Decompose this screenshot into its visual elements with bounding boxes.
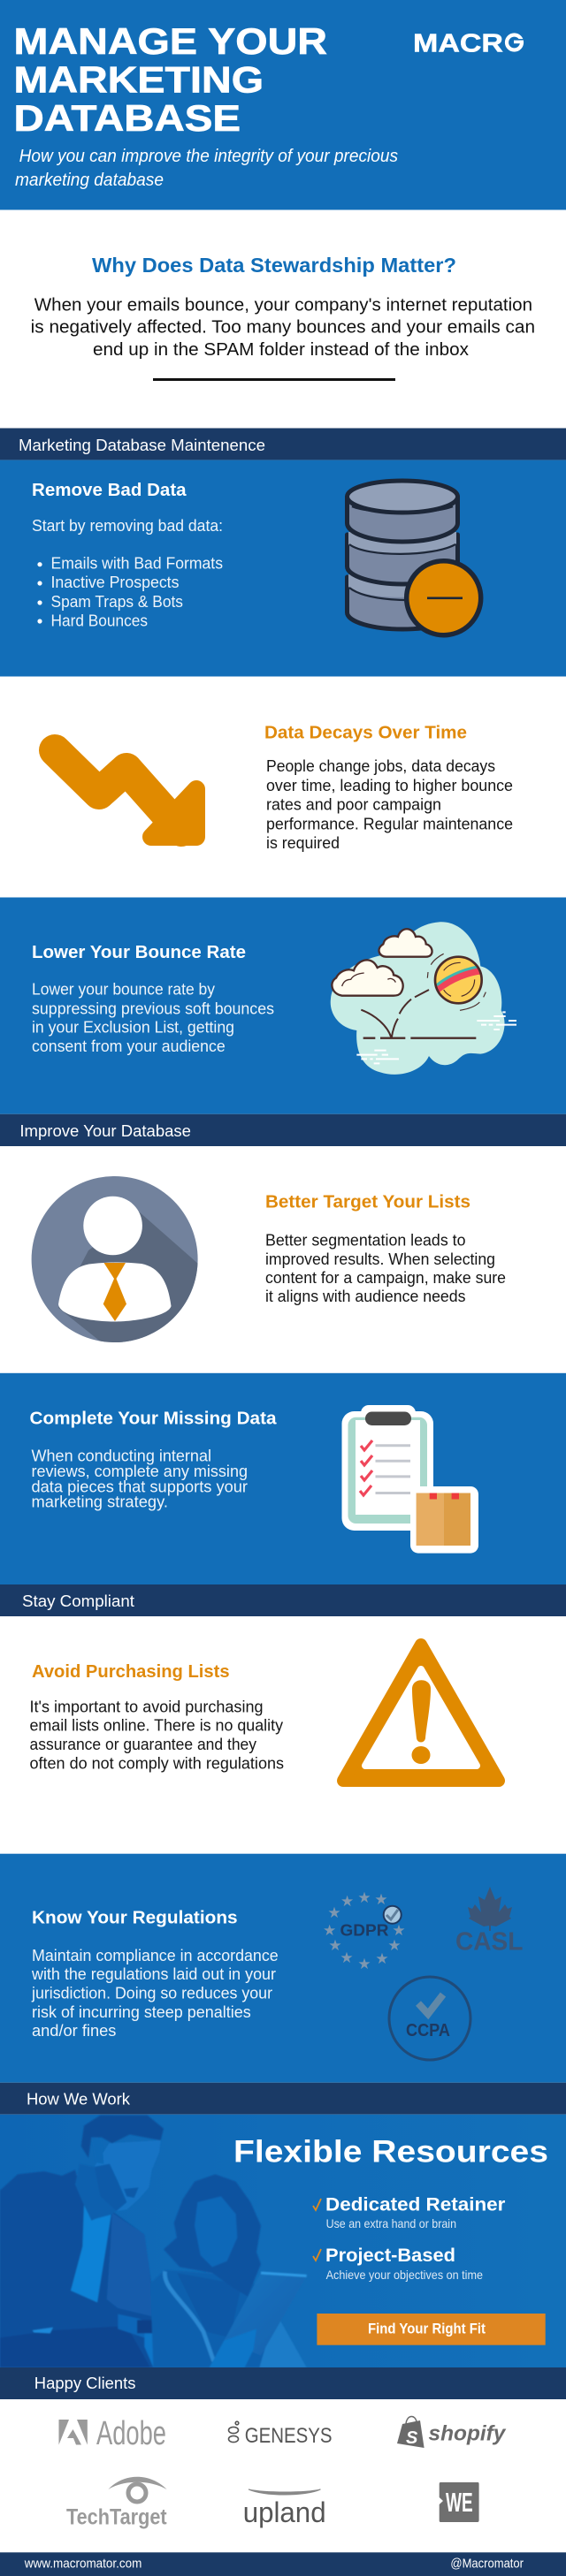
section band: improve your database	[0, 1114, 566, 1146]
icon: person with tie	[32, 1176, 198, 1343]
icon: bouncing ball	[331, 922, 516, 1075]
panel: avoid purchasing lists	[30, 1645, 499, 1781]
bullet list: Emails with Bad Formats	[51, 555, 223, 573]
icon: gdpr badge: ★	[387, 1937, 402, 1954]
logo: shopify	[397, 2416, 507, 2448]
text block: with the regulations laid out in your	[31, 1965, 276, 1983]
text block: improved results. When selecting	[265, 1250, 495, 1268]
text block: content for a campaign, make sure	[265, 1269, 506, 1287]
text block: and/or fines	[32, 2022, 116, 2040]
logo: macro: MACR	[413, 30, 503, 58]
section band: improve your database: Improve Your Database	[19, 1122, 191, 1140]
heading: Lower Your Bounce Rate	[32, 943, 246, 962]
logo: we: WE	[446, 2487, 473, 2518]
panel: header	[0, 0, 566, 210]
heading: Better Target Your Lists	[265, 1192, 470, 1212]
text block: end up in the SPAM folder instead of the inbox	[93, 340, 469, 360]
text block: Lower your bounce rate by	[32, 980, 215, 998]
logo: techtarget	[66, 2477, 167, 2530]
icon: gdpr badge: ★	[323, 1922, 336, 1939]
title: MANAGE YOUR	[14, 20, 327, 62]
title: MARKETING	[14, 58, 264, 101]
icon: gdpr badge: ★	[375, 1950, 389, 1967]
text block: It's important to avoid purchasing	[30, 1698, 264, 1716]
text block: performance. Regular maintenance	[266, 816, 513, 833]
heading: Avoid Purchasing Lists	[32, 1662, 230, 1682]
text block: When your emails bounce, your company's internet reputation	[34, 296, 532, 315]
text block: Better segmentation leads to	[265, 1232, 465, 1250]
panel: flexible resources	[0, 2115, 566, 2367]
text block: email lists online. There is no quality	[30, 1717, 283, 1735]
text block	[31, 296, 535, 360]
text block: People change jobs, data decays	[266, 757, 495, 775]
text block: is required	[266, 834, 340, 852]
option: dedicated retainer: Use an extra hand or brain	[326, 2216, 456, 2230]
title	[14, 20, 327, 139]
heading: Remove Bad Data	[32, 481, 187, 500]
icon: casl badge: CASL	[455, 1928, 523, 1957]
text block	[30, 1698, 284, 1772]
section band: marketing database maintenence: Marketing Database Maintenence	[19, 437, 265, 454]
photo: colleagues with tablet	[0, 2116, 307, 2367]
text block: over time, leading to higher bounce	[266, 777, 513, 794]
text block: marketing strategy.	[32, 1493, 168, 1511]
panel: data decays over time	[55, 723, 513, 852]
option: project-based: Project-Based	[325, 2245, 455, 2266]
section band: happy clients: Happy Clients	[34, 2375, 135, 2392]
section band: happy clients	[0, 2367, 566, 2399]
text block	[265, 1232, 506, 1305]
subtitle	[15, 147, 398, 190]
option: project-based	[313, 2245, 483, 2282]
icon: warning triangle	[343, 1645, 499, 1781]
icon: casl badge	[455, 1887, 523, 1957]
logo: adobe: Adobe	[96, 2415, 166, 2452]
text block: often do not comply with regulations	[30, 1754, 284, 1772]
text block: Start by removing bad data:	[32, 517, 223, 535]
section band: how we work: How We Work	[27, 2091, 131, 2109]
text block: rates and poor campaign	[266, 796, 441, 814]
logo: adobe	[58, 2415, 166, 2452]
panel: why data stewardship matters	[31, 254, 535, 381]
text block	[31, 1947, 279, 2040]
logo: we	[440, 2482, 479, 2522]
heading: Data Decays Over Time	[264, 723, 467, 742]
option: dedicated retainer	[313, 2195, 505, 2230]
icon: clipboard and box	[341, 1405, 478, 1554]
panel: lower your bounce rate	[0, 898, 566, 1114]
icon: gdpr badge: GDPR	[340, 1922, 389, 1940]
section band: marketing database maintenence	[0, 428, 566, 460]
text block: it aligns with audience needs	[265, 1288, 465, 1305]
title: DATABASE	[14, 97, 241, 139]
icon: gdpr badge: ★	[340, 1893, 354, 1910]
bullet list: Inactive Prospects	[51, 574, 179, 591]
text block: risk of incurring steep penalties	[32, 2003, 251, 2021]
text block: Maintain compliance in accordance	[32, 1947, 279, 1964]
logo: techtarget: TechTarget	[66, 2505, 167, 2530]
icon: downward arrow	[55, 750, 196, 837]
icon: database with minus	[347, 481, 481, 635]
text block: suppressing previous soft bounces	[32, 999, 274, 1017]
text block: in your Exclusion List, getting	[32, 1019, 234, 1037]
button: Find Your Right Fit	[368, 2321, 486, 2337]
panel: know your regulations	[0, 1854, 566, 2083]
logo: genesys: GENESYS	[245, 2424, 333, 2448]
logo: upland: upland	[243, 2496, 326, 2528]
subtitle: How you can improve the integrity of your precious	[19, 147, 398, 166]
heading: Know Your Regulations	[32, 1909, 238, 1928]
footer	[0, 2552, 566, 2576]
icon: ccpa badge: CCPA	[406, 2021, 450, 2040]
text block	[32, 980, 274, 1055]
panel: better target your lists	[32, 1176, 506, 1343]
section band: stay compliant	[0, 1584, 566, 1616]
text block: data pieces that supports your	[32, 1478, 248, 1495]
bullet list	[37, 555, 223, 630]
bullet list: Hard Bounces	[51, 612, 148, 630]
heading: Flexible Resources	[233, 2135, 548, 2169]
text block	[32, 1448, 248, 1511]
option: project-based: Achieve your objectives on time	[326, 2268, 483, 2282]
logo: macro	[413, 30, 526, 58]
text block: When conducting internal	[32, 1448, 211, 1465]
logo: shopify: shopify	[428, 2422, 507, 2446]
panel: client logos	[58, 2415, 507, 2530]
panel: complete your missing data	[0, 1373, 566, 1584]
text block	[266, 757, 513, 852]
panel: remove bad data	[0, 460, 566, 677]
option: dedicated retainer: Dedicated Retainer	[325, 2195, 505, 2215]
text block: is negatively affected. Too many bounces and your emails can	[31, 318, 535, 338]
heading: Why Does Data Stewardship Matter?	[92, 254, 456, 277]
icon: gdpr badge: ★	[357, 1956, 371, 1972]
section band: stay compliant: Stay Compliant	[22, 1592, 134, 1610]
text block: consent from your audience	[32, 1037, 226, 1055]
footer: www.macromator.com	[24, 2557, 142, 2572]
button	[317, 2314, 546, 2345]
text block: assurance or guarantee and they	[30, 1736, 256, 1753]
section band: how we work	[0, 2083, 566, 2115]
heading: Complete Your Missing Data	[30, 1410, 277, 1429]
text block: jurisdiction. Doing so reduces your	[31, 1985, 272, 2002]
text block: reviews, complete any missing	[32, 1463, 248, 1480]
icon: gdpr badge: ★	[357, 1889, 371, 1906]
icon: gdpr badge: ★	[327, 1904, 341, 1921]
logo: shopify: S	[406, 2428, 418, 2448]
icon: gdpr badge: ★	[340, 1949, 354, 1966]
subtitle: marketing database	[15, 171, 164, 190]
logo: genesys	[228, 2421, 333, 2448]
icon: gdpr badge	[323, 1889, 406, 1972]
icon: gdpr badge: ★	[374, 1891, 388, 1908]
icon: ccpa badge	[389, 1977, 470, 2060]
bullet list: Spam Traps & Bots	[51, 593, 183, 611]
icon: gdpr badge: ★	[328, 1937, 342, 1954]
icon: gdpr badge: ★	[392, 1922, 406, 1939]
footer: @Macromator	[450, 2557, 524, 2572]
